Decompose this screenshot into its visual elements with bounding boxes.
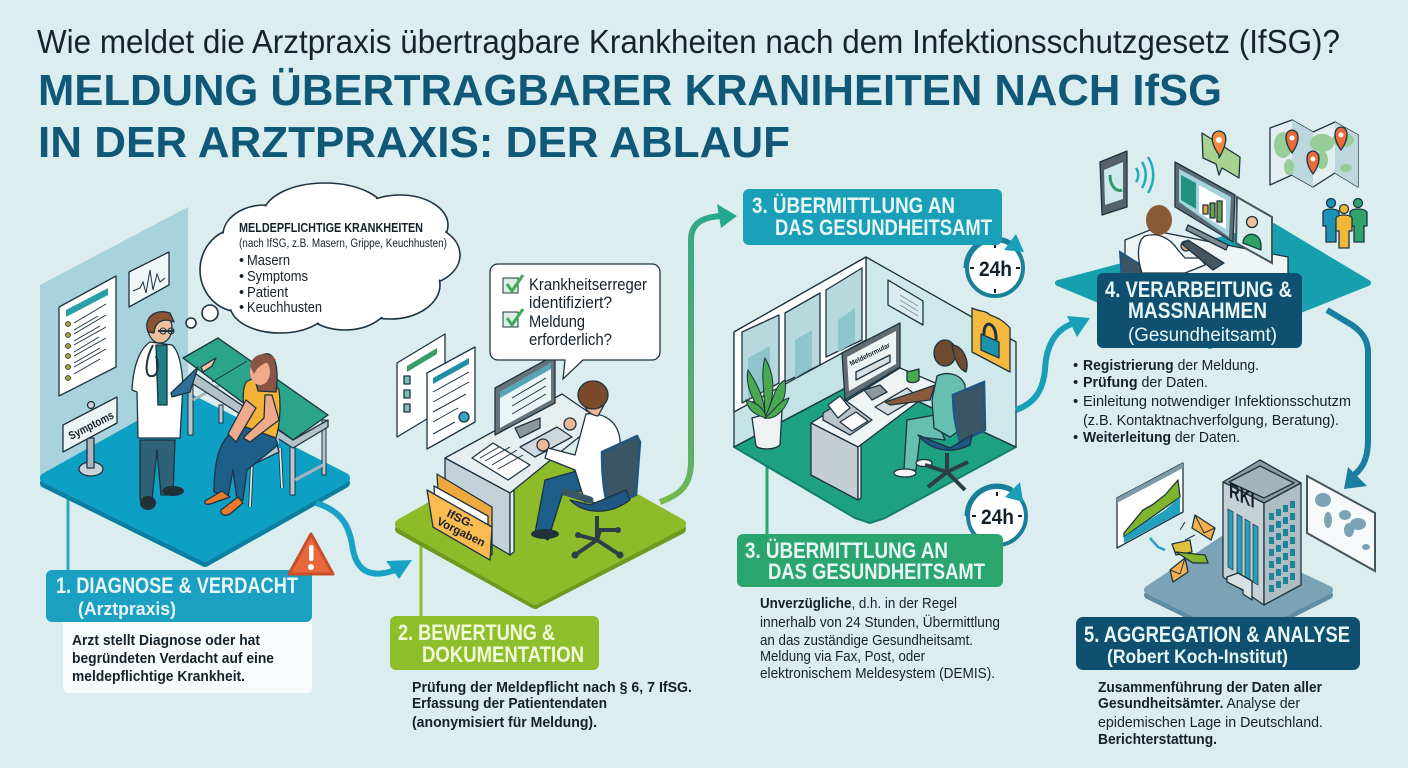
cloud text: • xyxy=(239,285,244,301)
step 4 description xyxy=(1073,357,1351,446)
step 3 header top: DAS GESUNDHEITSAMT xyxy=(775,215,992,240)
step 4 description: (z.B. Kontaktnachverfolgung, Beratung). xyxy=(1083,412,1339,429)
cloud text: (nach IfSG, z.B. Masern, Grippe, Keuchhusten) xyxy=(239,238,447,250)
step 3 header top: 3. ÜBERMITTLUNG AN xyxy=(752,193,955,218)
step 4 description: Einleitung notwendiger Infektionsschutzm xyxy=(1083,393,1351,410)
cloud text: Symptoms xyxy=(247,269,308,285)
small map with pin xyxy=(1202,131,1240,178)
cloud text: Keuchhusten xyxy=(247,300,322,316)
desk xyxy=(445,394,600,555)
sign: symptoms: Symptoms xyxy=(67,410,116,443)
title: main heading: MELDUNG ÜBERTRAGBARER KRANIHEITEN NACH IfSG xyxy=(38,66,1222,115)
world map panel xyxy=(1307,476,1375,571)
step 1 label xyxy=(46,570,312,622)
step 2 label: DOKUMENTATION xyxy=(422,642,584,667)
patient xyxy=(205,354,280,515)
thought cloud: notifiable diseases xyxy=(186,183,460,333)
step 1 label: (Arztpraxis) xyxy=(78,599,176,619)
teal platform xyxy=(1058,226,1368,346)
folder: IfSG-Vorgaben xyxy=(427,474,492,560)
step 4 description: • xyxy=(1073,374,1078,391)
folder: IfSG-Vorgaben: Vorgaben xyxy=(435,516,487,549)
building windows grid xyxy=(1269,501,1295,592)
speech bubble: checklist xyxy=(490,264,660,379)
step 5 description xyxy=(1098,679,1323,748)
24h clock top xyxy=(966,234,1024,296)
back wall xyxy=(40,207,188,488)
wall monitor with heartbeat xyxy=(129,252,169,307)
24h clock bottom xyxy=(967,482,1026,545)
slate platform xyxy=(1148,540,1329,640)
step 5 description: Zusammenführung der Daten aller xyxy=(1098,679,1322,696)
doctor xyxy=(132,312,216,510)
exam bed xyxy=(183,338,328,495)
step 5 scene: RKI xyxy=(1117,460,1375,640)
step 4 label: 4. VERARBEITUNG & xyxy=(1105,277,1292,302)
floating documents xyxy=(397,334,475,449)
step 3 description: an das zuständige Gesundheitsamt. xyxy=(760,632,973,649)
step 4 description: • xyxy=(1073,393,1078,410)
title: main heading xyxy=(38,66,1222,167)
step 3 label bottom: DAS GESUNDHEITSAMT xyxy=(768,559,985,584)
step 2 description xyxy=(412,679,692,731)
main monitor xyxy=(1175,162,1235,250)
step 3 description xyxy=(760,595,1000,682)
wall poster xyxy=(59,276,116,396)
step 5 description: Gesundheitsämter. Analyse der xyxy=(1098,695,1300,712)
world map with pins xyxy=(1270,120,1358,187)
step 2 label xyxy=(390,616,599,670)
smartphone with signal xyxy=(1100,151,1153,215)
step 2 scene: documentation desk xyxy=(397,334,681,604)
cloud text: • xyxy=(239,300,244,316)
step 2 description: Prüfung der Meldepflicht nach § 6, 7 IfSG. xyxy=(412,679,692,696)
office worker xyxy=(531,381,622,540)
group of people xyxy=(1323,198,1367,248)
step 3 description: Meldung via Fax, Post, oder xyxy=(760,648,925,665)
cloud text xyxy=(239,221,447,316)
step 5 label: (Robert Koch-Institut) xyxy=(1107,647,1288,668)
arrow: step 2 to step 3 xyxy=(660,204,737,502)
chair xyxy=(245,425,282,507)
arrow: step 3 to step 4 xyxy=(1016,316,1090,410)
step 1 label: 1. DIAGNOSE & VERDACHT xyxy=(56,573,298,598)
arrow: step 4 to step 5 xyxy=(1327,310,1368,489)
second monitor xyxy=(1236,197,1272,263)
warning triangle icon xyxy=(289,534,333,574)
desk xyxy=(1125,230,1288,290)
step 2 description: (anonymisiert für Meldung). xyxy=(412,714,597,731)
speech bubble: checklist: Krankheitserreger xyxy=(529,276,647,294)
security padlock shield xyxy=(972,308,1010,372)
computer: Meldeformular xyxy=(842,323,919,415)
step 3 label bottom: 3. ÜBERMITTLUNG AN xyxy=(745,538,948,563)
step 4 description: Registrierung der Meldung. xyxy=(1083,357,1259,374)
step 5 label xyxy=(1076,617,1360,670)
step 5 description: Berichterstattung. xyxy=(1098,731,1217,748)
step 1 description xyxy=(63,616,312,693)
step 1 scene: doctor's office xyxy=(40,207,345,562)
area chart panel xyxy=(1117,463,1183,548)
floor platform xyxy=(45,398,345,562)
speech bubble: checklist: Meldung xyxy=(529,313,585,331)
step 4 description: Weiterleitung der Daten. xyxy=(1083,429,1240,446)
nurse chair xyxy=(918,382,985,490)
connector lines xyxy=(68,465,767,618)
step 4 scene: health office xyxy=(1058,120,1368,346)
step 1 description: begründeten Verdacht auf eine xyxy=(72,650,274,667)
potted plant xyxy=(746,358,789,449)
speech bubble: checklist: identifiziert? xyxy=(529,294,612,312)
step 4 label: (Gesundheitsamt) xyxy=(1128,325,1277,346)
green platform xyxy=(400,445,681,604)
seated nurse xyxy=(885,340,967,477)
24h clock bottom: 24h xyxy=(981,506,1014,529)
step 2 label: 2. BEWERTUNG & xyxy=(398,620,555,645)
step 3 description: Unverzügliche, d.h. in der Regel xyxy=(760,595,957,612)
cloud text: MELDEPFLICHTIGE KRANKHEITEN xyxy=(239,221,423,235)
cloud text: • xyxy=(239,253,244,269)
step 4 description: Prüfung der Daten. xyxy=(1083,374,1208,391)
step 3 header top xyxy=(743,189,1002,245)
step 5 label: 5. AGGREGATION & ANALYSE xyxy=(1084,622,1350,647)
step 4 label: MASSNAHMEN xyxy=(1128,298,1267,323)
desk with fax xyxy=(811,368,940,500)
speech bubble: checklist: erforderlich? xyxy=(529,331,612,349)
step 1 description: meldepflichtige Krankheit. xyxy=(72,668,245,685)
step 4 description: • xyxy=(1073,429,1078,446)
computer xyxy=(495,355,572,457)
folder: IfSG-Vorgaben: IfSG- xyxy=(445,508,476,531)
analyst xyxy=(1138,205,1224,273)
step 5 description: epidemischen Lage in Deutschland. xyxy=(1098,714,1323,731)
visitor chair xyxy=(1120,252,1154,280)
step 4 description: • xyxy=(1073,357,1078,374)
cloud text: • xyxy=(239,269,244,285)
step 3 scene: reporting office room xyxy=(734,234,1026,545)
office chair xyxy=(565,436,640,558)
step 1 description: Arzt stellt Diagnose oder hat xyxy=(72,632,260,649)
step 3 description: elektronischem Meldesystem (DEMIS). xyxy=(760,665,995,682)
title: question line: Wie meldet die Arztpraxis übertragbare Krankheiten nach dem Infektionsschutzgesetz (IfSG)? xyxy=(37,23,1340,60)
step 2 description: Erfassung der Patientendaten xyxy=(412,695,607,712)
envelopes and data arrows xyxy=(1150,515,1215,582)
wall certificate xyxy=(888,280,923,325)
room floor xyxy=(734,377,1016,523)
computer: Meldeformular: Meldeformular xyxy=(849,342,892,368)
cloud text: Patient xyxy=(247,285,288,301)
24h clock top: 24h xyxy=(979,258,1012,281)
step 3 label bottom xyxy=(737,534,1003,587)
step 3 description: innerhalb von 24 Stunden, Übermittlung xyxy=(760,613,1000,631)
fax machine xyxy=(823,396,872,435)
title: main heading: IN DER ARZTPRAXIS: DER ABLAUF xyxy=(38,118,790,167)
cloud text: Masern xyxy=(247,253,290,269)
room walls xyxy=(734,257,866,447)
arrow: step 1 to step 2 xyxy=(316,503,412,579)
RKI building xyxy=(1223,460,1301,605)
windows xyxy=(734,257,866,412)
RKI building: RKI xyxy=(1229,478,1255,514)
sign: symptoms xyxy=(63,397,117,476)
step 4 label xyxy=(1097,273,1302,348)
